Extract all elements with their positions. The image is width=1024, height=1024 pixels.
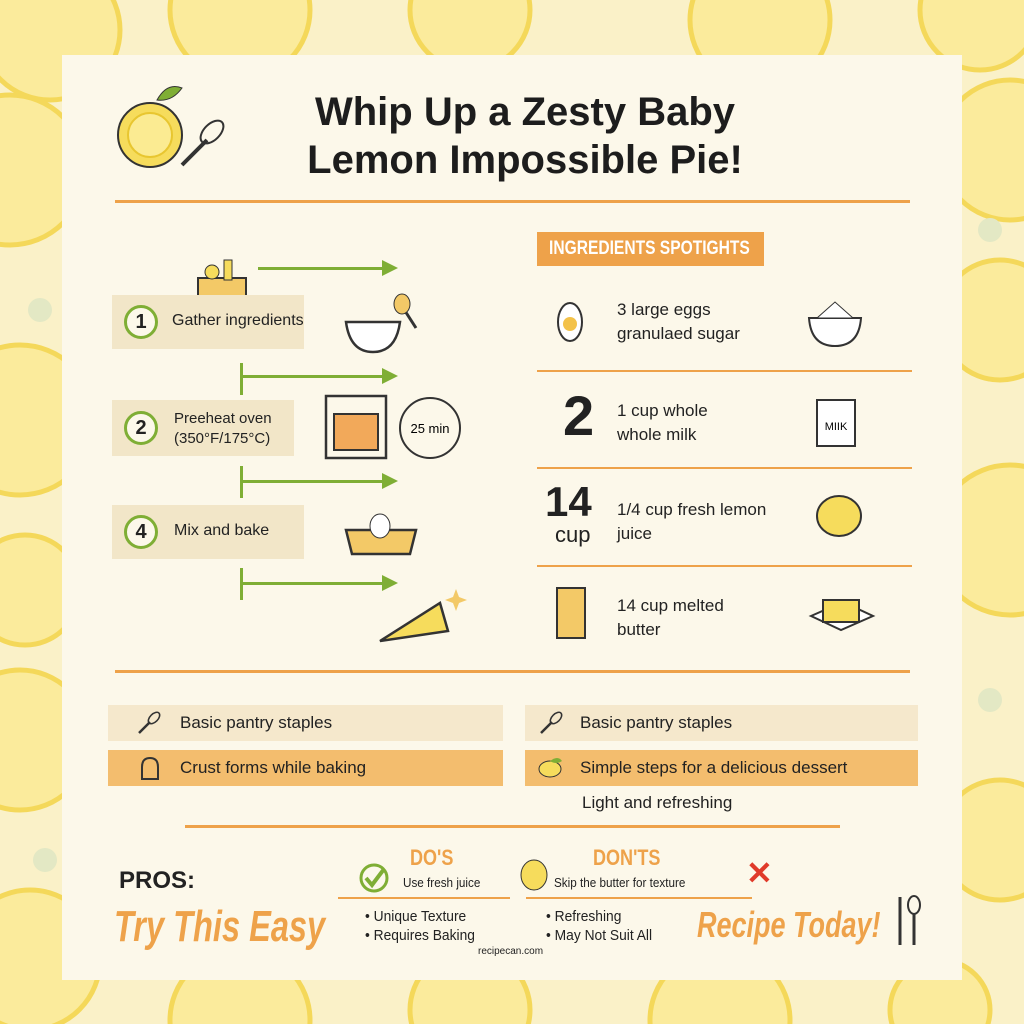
do's	[360, 864, 388, 892]
icon: oven and timer	[324, 394, 461, 460]
bottom: pros / dos / donts: • Requires Baking	[365, 927, 475, 944]
band: pantry staples right	[525, 705, 918, 741]
bottom: pros / dos / donts: Skip the butter for texture	[554, 875, 685, 890]
ingredient: eggs: 3 large eggs	[617, 300, 711, 319]
step 1: Gather ingredients	[172, 312, 304, 329]
bottom: pros / dos / donts: • Unique Texture	[365, 908, 466, 925]
band: simple steps	[525, 750, 918, 786]
ingredient: eggs: granulaed sugar	[617, 324, 740, 343]
step 4: 4	[135, 521, 147, 543]
bottom: pros / dos / donts: Use fresh juice	[403, 875, 480, 890]
icon: bowl	[344, 294, 418, 354]
ingredient: milk: 1 cup whole	[617, 401, 708, 420]
bottom: pros / dos / donts: • May Not Suit All	[546, 927, 652, 944]
text: light: Light and refreshing	[582, 793, 732, 812]
step 1	[112, 295, 304, 349]
step 4	[112, 505, 304, 559]
step 2	[112, 400, 294, 456]
ingredients header: INGREDIENTS SPOTIGHTS	[549, 238, 750, 259]
ingredient: milk	[563, 384, 856, 447]
bottom: pros / dos / donts: Recipe Today!	[697, 904, 881, 945]
ingredient: butter: butter	[617, 620, 660, 639]
icon: pie slice	[379, 589, 467, 642]
feature bands	[108, 705, 918, 812]
icon: fork spoon	[898, 895, 921, 945]
icon: whisk left	[138, 712, 160, 734]
title	[307, 90, 743, 182]
ingredient: lemon juice	[545, 478, 862, 547]
ingredients header	[537, 232, 764, 266]
band: pantry staples right: Basic pantry staples	[580, 713, 732, 732]
icon: basket	[197, 260, 247, 295]
icon: mitt	[141, 757, 159, 780]
ingredient: butter	[556, 587, 876, 639]
bottom: pros / dos / donts: DO'S	[410, 845, 453, 870]
icon: mixing dish	[344, 514, 418, 556]
ingredient: lemon juice: 1/4 cup fresh lemon	[617, 500, 766, 519]
ingredient: lemon juice: juice	[617, 524, 652, 543]
ingredient: butter: 14 cup melted	[617, 596, 724, 615]
icon: red x: ✕	[746, 855, 773, 891]
main panel	[62, 55, 962, 980]
don'ts	[520, 860, 548, 890]
bottom: pros / dos / donts: recipecan.com	[478, 946, 543, 957]
ingredient: lemon juice: 14	[545, 478, 592, 525]
ingredient: milk: 2	[563, 384, 594, 447]
ingredient: milk: whole milk	[617, 425, 696, 444]
bottom: pros / dos / donts: • Refreshing	[546, 908, 621, 925]
bottom: pros / dos / donts: DON'TS	[593, 845, 660, 870]
title: Lemon Impossible Pie!	[307, 138, 743, 182]
ingredient: lemon juice: cup	[555, 522, 590, 547]
steps panel	[112, 260, 467, 642]
step 2: 2	[135, 417, 147, 439]
bottom: pros / dos / donts: PROS:	[119, 867, 195, 894]
step 2: (350°F/175°C)	[174, 430, 270, 447]
icon: lemon and whisk	[117, 86, 224, 168]
band: pantry staples left	[108, 705, 503, 741]
bottom: pros / dos / donts: Try This Easy	[114, 902, 325, 951]
ingredient: eggs	[557, 300, 862, 347]
bottom: pros / dos / donts	[114, 845, 921, 957]
step 2: Preeheat oven	[174, 410, 272, 427]
band: crust: Crust forms while baking	[180, 758, 366, 777]
ingredients panel	[537, 232, 912, 639]
step 4: Mix and bake	[174, 522, 269, 539]
band: crust	[108, 750, 503, 786]
ingredient: milk: MIIK	[825, 421, 848, 433]
icon: lemon leaf	[538, 758, 562, 778]
band: simple steps: Simple steps for a delicious dessert	[580, 758, 847, 777]
step 1: 1	[135, 311, 147, 333]
icon: oven and timer: 25 min	[410, 421, 450, 436]
band: pantry staples left: Basic pantry staples	[180, 713, 332, 732]
icon: whisk right	[540, 712, 562, 734]
title: Whip Up a Zesty Baby	[315, 90, 735, 134]
